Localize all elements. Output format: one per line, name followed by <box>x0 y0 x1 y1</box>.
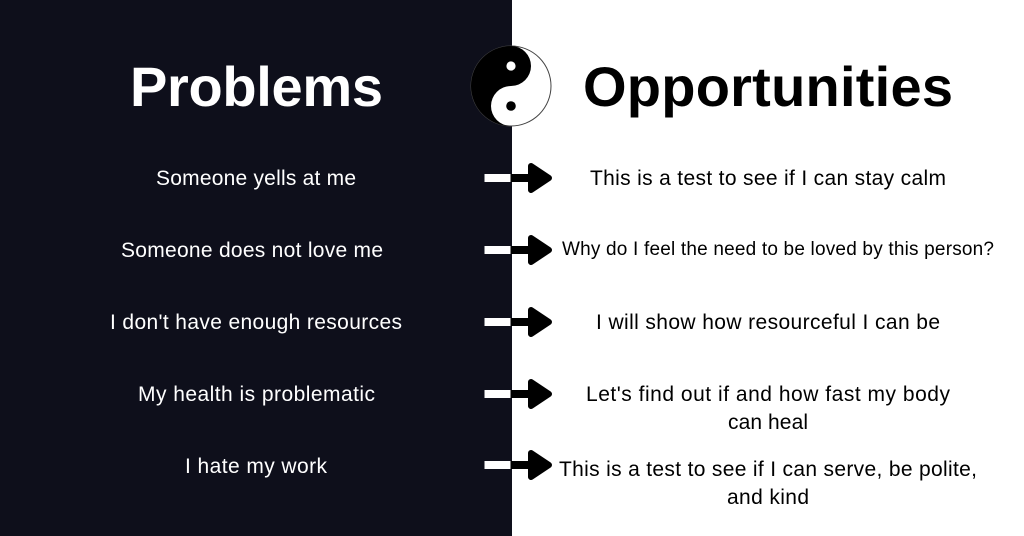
arrows <box>484 166 549 477</box>
opportunity 2: Why do I feel the need to be loved by this person? <box>562 239 994 260</box>
opportunity 3: I will show how resourceful I can be <box>596 311 940 334</box>
opportunity 4: can heal <box>728 411 808 434</box>
heading: Problems: Problems <box>130 55 383 118</box>
opportunity 5: and kind <box>727 486 809 509</box>
arrow 3 <box>484 310 549 334</box>
problem 5: I hate my work <box>185 455 328 478</box>
arrow 1 <box>484 166 549 190</box>
problem 4: My health is problematic <box>138 383 375 406</box>
problem 1: Someone yells at me <box>156 167 356 190</box>
problem 3: I don't have enough resources <box>110 311 402 334</box>
arrow 4 <box>484 382 549 406</box>
problem 2: Someone does not love me <box>121 239 383 262</box>
problem texts <box>110 167 402 478</box>
opportunity texts <box>559 167 994 509</box>
opportunity 4: Let's find out if and how fast my body <box>586 383 950 406</box>
opportunity 1: This is a test to see if I can stay calm <box>590 167 946 190</box>
icon: yin yang <box>471 46 551 126</box>
heading: Opportunities: Opportunities <box>583 55 953 118</box>
arrow 5 <box>484 453 549 477</box>
panel: opportunities background <box>512 0 1024 536</box>
panel: problems background <box>0 0 512 536</box>
arrow 2 <box>484 238 549 262</box>
opportunity 5: This is a test to see if I can serve, be polite, <box>559 458 977 481</box>
opportunity 4 <box>586 383 950 434</box>
opportunity 5 <box>559 458 977 509</box>
